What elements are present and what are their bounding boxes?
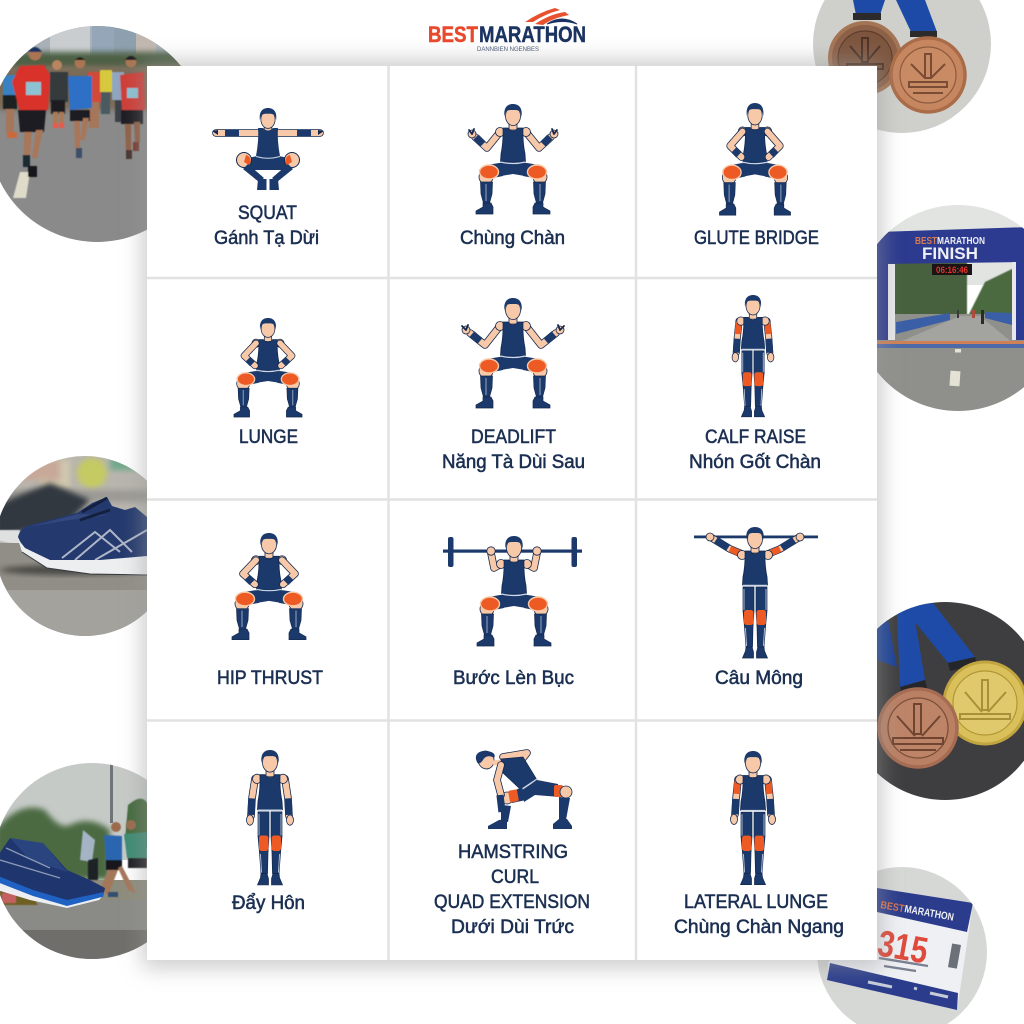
- icon: standing figure with orange shoulders: [732, 295, 774, 417]
- label: hamstring curl quad extension: QUAD EXTENSION: [434, 891, 590, 913]
- photo: finish arch: 06:16:46: [936, 265, 968, 275]
- exercise: deadlift: [442, 298, 585, 473]
- photo: finish arch: FINISH: [922, 244, 978, 263]
- icon: overhead barbell figure: [477, 536, 551, 646]
- label: calf raise: Nhón Gốt Chàn: [689, 451, 821, 473]
- label: hamstring curl quad extension: CURL: [491, 866, 539, 888]
- label: chùng chàn: Chùng Chàn: [460, 227, 565, 249]
- icon: hip thrust figure: [232, 533, 306, 640]
- exercise: câu mông: [694, 527, 818, 689]
- label: squat: [214, 202, 319, 249]
- label: calf raise: [689, 426, 821, 473]
- label: calf raise: CALF RAISE: [705, 426, 806, 448]
- panel: exercise grid: [147, 66, 877, 960]
- photo: finish arch: MARATHON: [937, 235, 985, 247]
- label: lateral lunge: [674, 891, 844, 938]
- photo: race bib: [817, 867, 987, 1024]
- icon: lunge figure: [234, 318, 302, 417]
- photo: race bib: BEST: [879, 899, 906, 915]
- logo: DANNBIEN NGENBES: [477, 47, 539, 53]
- photo: runners on the road: [0, 26, 181, 242]
- photo: finish arch: [877, 205, 1024, 411]
- exercise: lateral lunge: [674, 751, 844, 938]
- exercise: hip thrust: [217, 533, 323, 689]
- icon: barbell: [443, 537, 582, 567]
- icon: hands on hips figure: [719, 103, 791, 215]
- exercise: đẩy hôn: [232, 750, 305, 914]
- icon: standing figure: [730, 751, 776, 885]
- exercise: hamstring curl: [434, 749, 590, 938]
- exercise: glute bridge: [694, 103, 819, 249]
- logo: [428, 8, 586, 53]
- photo: airborne blue shoe with runners: [0, 763, 147, 959]
- logo: BEST: [428, 22, 478, 47]
- label: lateral lunge: LATERAL LUNGE: [684, 891, 828, 913]
- photo: race bib: MARATHON: [903, 903, 955, 924]
- label: hamstring curl quad extension: Dưới Dùi Trức: [451, 916, 574, 938]
- label: glute bridge: GLUTE BRIDGE: [694, 227, 819, 249]
- exercise: squat: [212, 108, 324, 249]
- label: hamstring curl quad extension: HAMSTRING: [458, 841, 568, 863]
- logo: MARATHON: [479, 22, 586, 47]
- label: deadlift: Năng Tà Dùi Sau: [442, 451, 585, 473]
- label: bước lèn bục: Bước Lèn Bục: [453, 667, 574, 689]
- icon: bent over figure: [476, 749, 572, 829]
- panel shadow: [142, 60, 882, 968]
- exercise: calf raise: [689, 295, 821, 473]
- label: squat: SQUAT: [238, 202, 297, 224]
- label: deadlift: DEADLIFT: [471, 426, 556, 448]
- label: hip thrust: HIP THRUST: [217, 667, 323, 689]
- icon: squat figure: [212, 108, 324, 190]
- exercise: lunge: [234, 318, 302, 448]
- exercise: bước lèn bục: [443, 536, 582, 689]
- label: lunge: LUNGE: [239, 426, 298, 448]
- exercise: chùng chàn: [460, 104, 565, 249]
- label: deadlift: [442, 426, 585, 473]
- photo: navy running shoe on pavement: [0, 456, 147, 636]
- label: hamstring curl quad extension: [434, 841, 590, 938]
- icon: open arm squat figure: [468, 104, 558, 214]
- photo: gold and copper medals: [877, 602, 1024, 800]
- label: lateral lunge: Chùng Chàn Ngang: [674, 916, 844, 938]
- icon: bar over shoulders: [694, 536, 818, 538]
- icon: standing figure: [246, 750, 294, 885]
- icon: wide arm figure: [462, 298, 564, 408]
- icon: standing figure with bar: [706, 527, 804, 658]
- label: câu mông: Câu Mông: [715, 667, 803, 689]
- label: đẩy hôn: Đẩy Hôn: [232, 892, 305, 914]
- photo: finish arch: BEST: [915, 235, 937, 247]
- label: squat: Gánh Tạ Dừi: [214, 227, 319, 249]
- photo: bronze medals: [813, 0, 991, 133]
- photo: race bib: 315: [875, 923, 931, 972]
